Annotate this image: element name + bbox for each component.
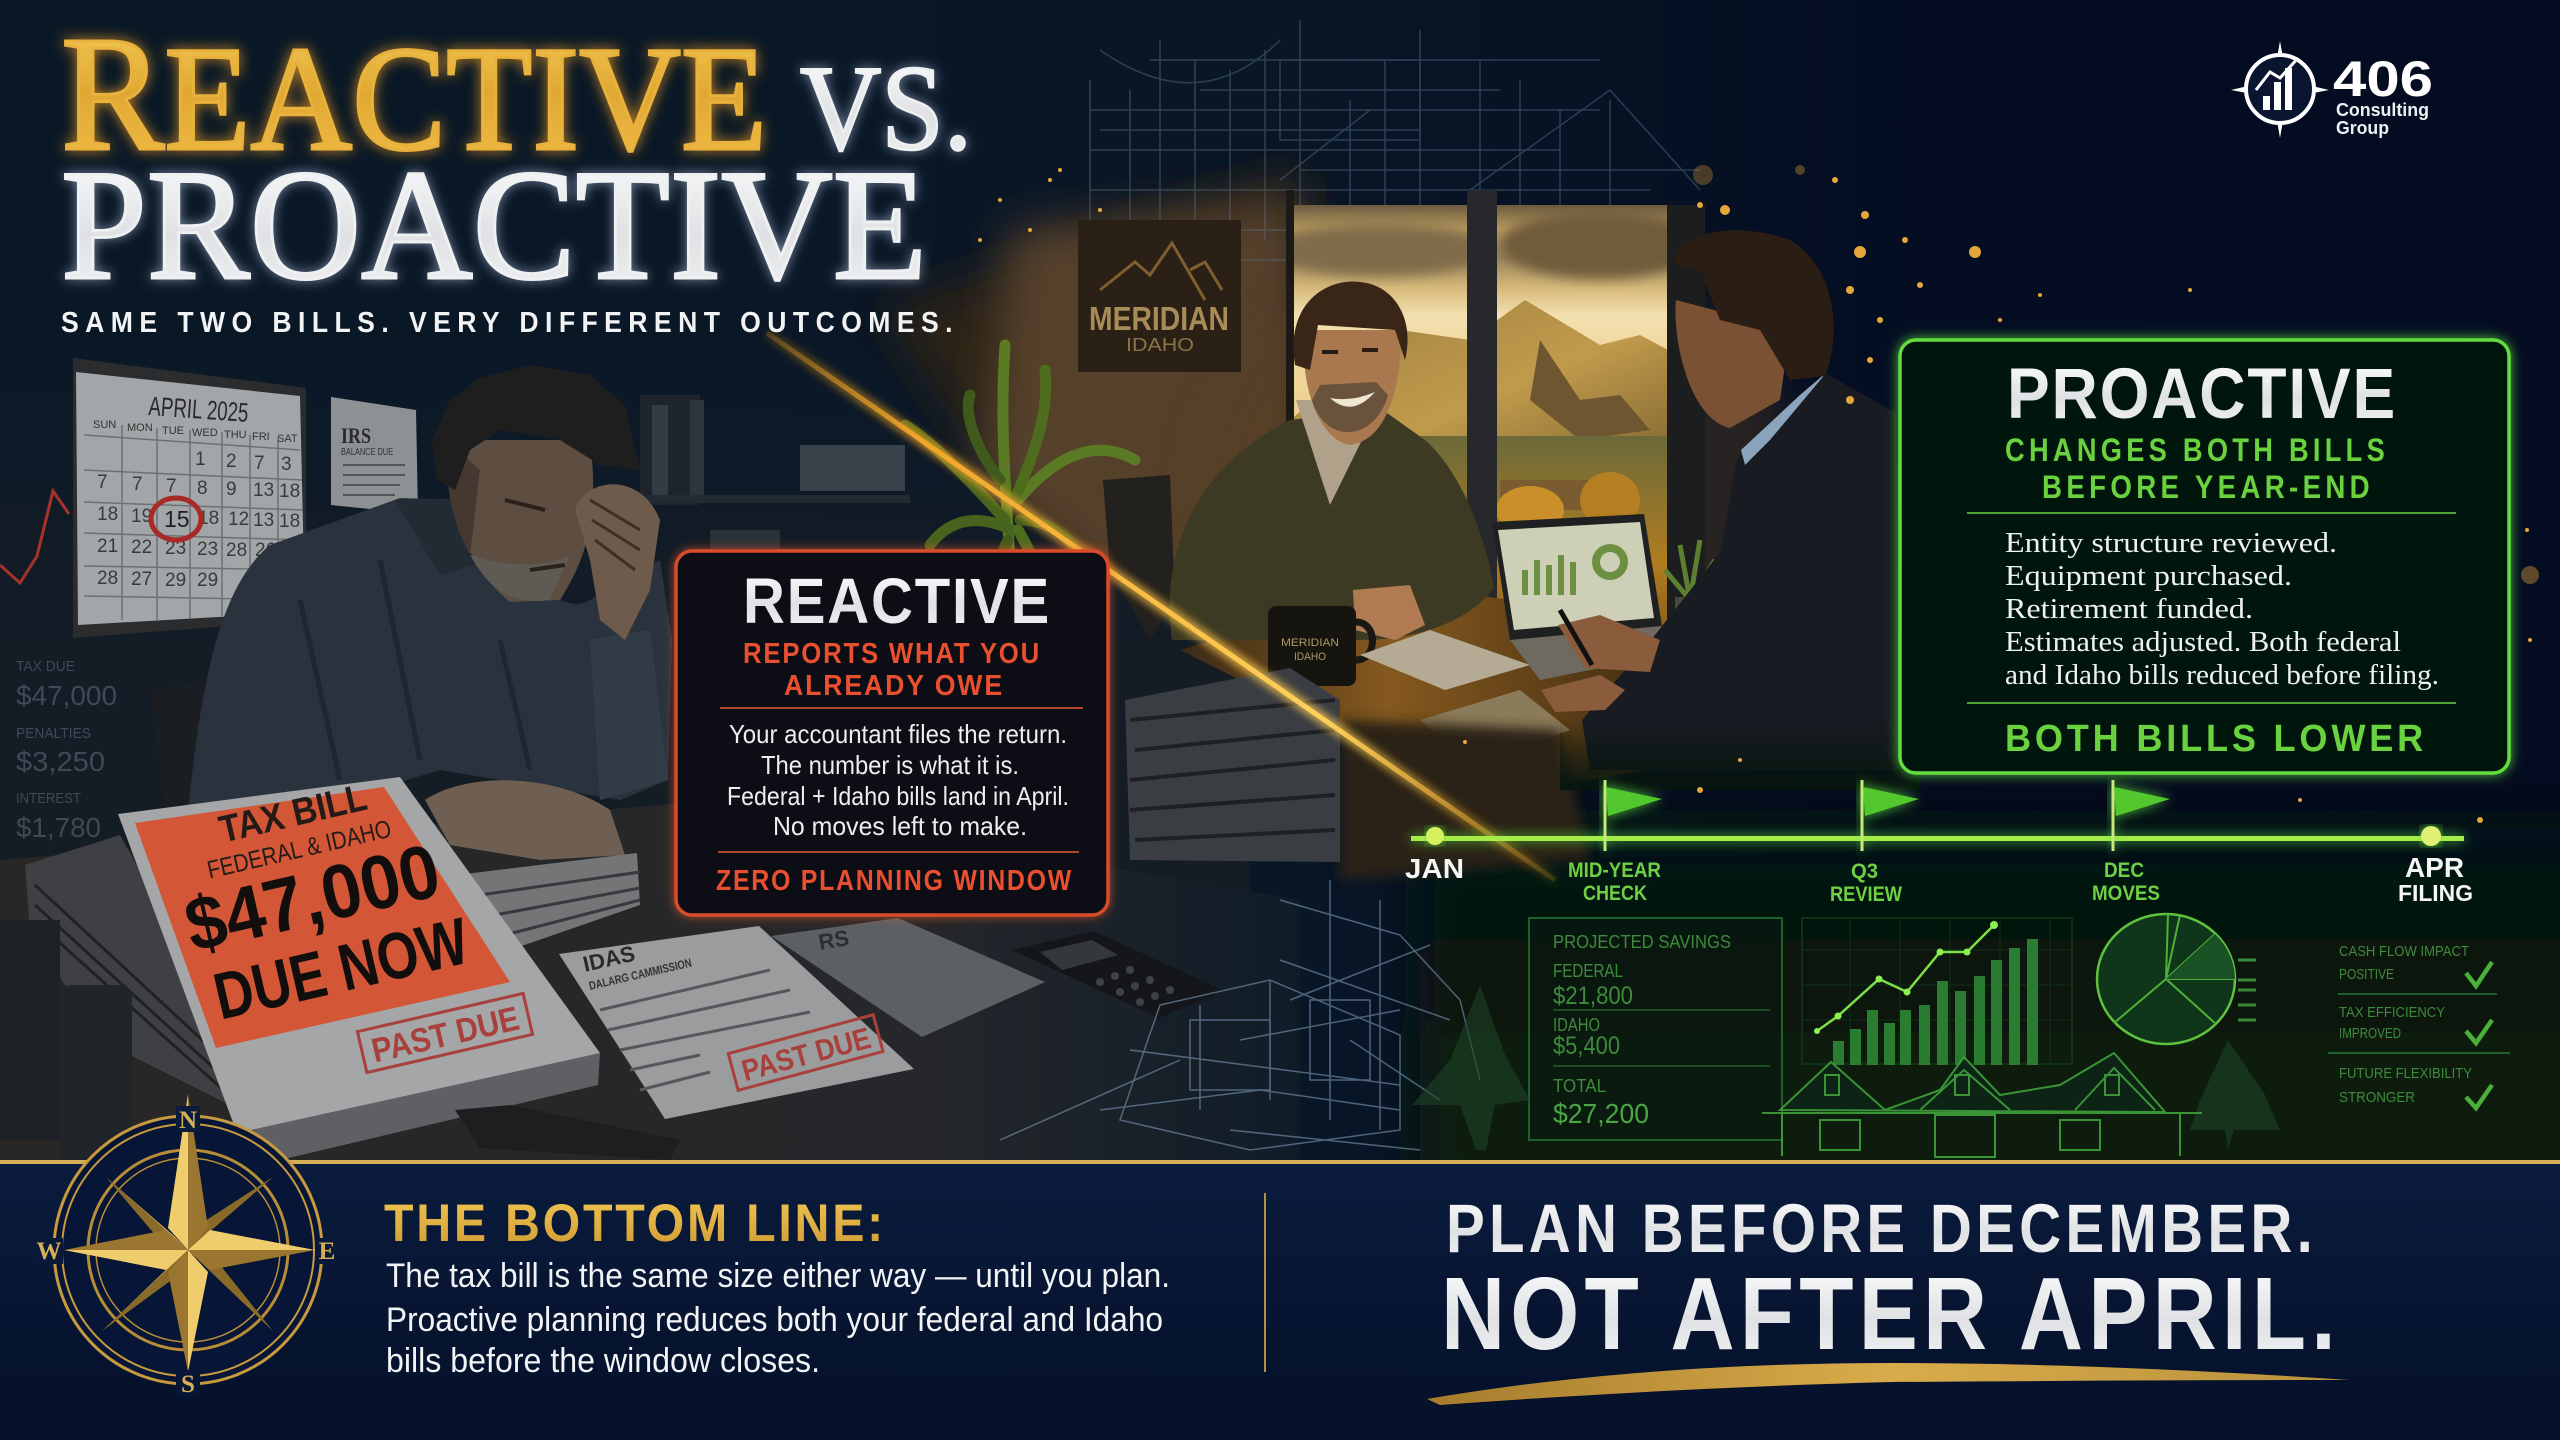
- calendar: 29: [165, 570, 186, 591]
- title: [61, 2, 972, 313]
- heading: proactive: PROACTIVE: [2007, 355, 2397, 434]
- calendar: 7: [132, 474, 143, 495]
- smiling man: [1170, 282, 1494, 640]
- gold brush stroke: [1427, 1363, 2349, 1405]
- compass emblem: W: [36, 1238, 62, 1265]
- reactive body text: Your accountant files the return.: [729, 719, 1067, 749]
- paper stack at desk: [1125, 668, 1340, 862]
- desk: [1180, 585, 1700, 800]
- panel: outcome checklist: CASH FLOW IMPACT: [2339, 943, 2469, 960]
- shelves: [640, 395, 910, 565]
- faded tax figures: $1,780: [16, 812, 101, 843]
- calculator: [1012, 931, 1224, 1018]
- tax bill: DUE NOW: [207, 903, 476, 1033]
- panel: projected savings: $21,800: [1553, 982, 1633, 1010]
- panel: projected savings: [1529, 918, 1782, 1140]
- bottom line body: The tax bill is the same size either way — until you plan.: [386, 1257, 1170, 1295]
- title: REACTIVE: [61, 2, 767, 185]
- IRS notice: BALANCE DUE: [341, 447, 393, 458]
- calendar: 7: [97, 472, 108, 493]
- heading: reactive: REACTIVE: [743, 565, 1051, 637]
- calendar: 29: [197, 570, 218, 591]
- compass emblem: E: [319, 1238, 335, 1265]
- panel: projected savings: IDAHO: [1553, 1015, 1600, 1035]
- panel: proactive: [1900, 340, 2509, 773]
- proactive body text: Equipment purchased.: [2005, 560, 2292, 592]
- tax bill: TAX BILL: [215, 777, 371, 851]
- calendar: APRIL 2025: [148, 391, 249, 428]
- flag: Q3: [1862, 780, 1919, 851]
- calendar: TUE: [162, 425, 184, 437]
- compass emblem: S: [181, 1371, 195, 1398]
- panel: projected savings: FEDERAL: [1553, 961, 1623, 981]
- reactive body text: No moves left to make.: [773, 811, 1027, 841]
- calendar: 13: [253, 480, 274, 501]
- fade into green zone: [1560, 720, 1920, 790]
- calendar: MON: [127, 422, 153, 434]
- gold sparkles: [978, 165, 2539, 823]
- faded tax figures: INTEREST: [16, 790, 81, 807]
- panel: projected savings: PROJECTED SAVINGS: [1553, 932, 1731, 952]
- calendar: 26: [255, 540, 276, 561]
- mug: [1268, 606, 1372, 686]
- proactive body text: and Idaho bills reduced before filing.: [2005, 659, 2439, 691]
- Meridian Idaho sign: MERIDIAN: [1089, 300, 1229, 337]
- timeline labels: MOVES: [2092, 882, 2160, 905]
- zero planning window: ZERO PLANNING WINDOW: [716, 865, 1073, 897]
- proactive body text: Estimates adjusted. Both federal: [2005, 626, 2401, 658]
- Idaho notice and IRS notice: RS: [817, 925, 851, 955]
- flag: mid-year: [1605, 780, 1662, 851]
- faded tax figures: PENALTIES: [16, 725, 91, 742]
- bottom band: [0, 1160, 2560, 1440]
- calendar: FRI: [252, 431, 270, 443]
- subheading: changes both bills: [2005, 432, 2389, 505]
- subheading: reports what you already owe: REPORTS WHAT YOU: [743, 638, 1041, 670]
- panel: projected savings: $27,200: [1553, 1098, 1649, 1129]
- closing headline: NOT AFTER APRIL.: [1441, 1256, 2341, 1371]
- tax bill: [118, 762, 600, 1160]
- compass mark: [2231, 41, 2329, 138]
- closing headline: [1441, 1190, 2341, 1371]
- reactive body text: The number is what it is.: [761, 750, 1019, 780]
- faded tax figures: $47,000: [16, 680, 117, 711]
- Idaho notice and IRS notice: [559, 918, 1045, 1119]
- calendar: 18: [97, 504, 118, 525]
- timeline labels: DEC: [2104, 859, 2144, 882]
- calendar: SUN: [93, 419, 116, 431]
- faded tax figures: [16, 658, 117, 843]
- subheading: changes both bills: BEFORE YEAR-END: [2042, 469, 2374, 505]
- panel: outcome checklist: FUTURE FLEXIBILITY: [2339, 1065, 2472, 1082]
- faded tax figures: TAX DUE: [16, 658, 75, 675]
- calendar: 27: [131, 569, 152, 590]
- small desk plant: [1665, 540, 1715, 637]
- logo: 406: [2333, 51, 2433, 107]
- Meridian Idaho sign: IDAHO: [1126, 335, 1194, 355]
- mug at left: [0, 920, 132, 1175]
- calendar: 15: [164, 506, 190, 532]
- reactive body text: [727, 719, 1069, 841]
- calendar: 7: [166, 476, 177, 497]
- IRS notice: [331, 397, 418, 514]
- tax bill: FEDERAL & IDAHO: [205, 815, 394, 884]
- stressed man: [188, 365, 672, 860]
- reactive body text: Federal + Idaho bills land in April.: [727, 781, 1069, 811]
- proactive body text: [2005, 527, 2439, 691]
- calendar: 1: [195, 449, 206, 470]
- gold diagonal divider: [767, 333, 1555, 880]
- bottom line body: bills before the window closes.: [386, 1342, 820, 1380]
- panel: outcome checklist: POSITIVE: [2339, 966, 2394, 983]
- marker pen: [455, 1105, 680, 1160]
- wood shadow under desk: [1340, 720, 1590, 880]
- chair back: [150, 680, 215, 810]
- panel: outcome checklist: IMPROVED: [2339, 1025, 2401, 1042]
- mug: MERIDIAN: [1281, 637, 1339, 649]
- title: VS.: [800, 41, 972, 176]
- subtitle: SAME TWO BILLS. VERY DIFFERENT OUTCOMES.: [61, 307, 959, 339]
- timeline labels: [1405, 852, 2473, 906]
- Idaho notice and IRS notice: PAST DUE: [738, 1022, 874, 1088]
- office scene: [905, 190, 1920, 880]
- panel: outcome checklist: [2328, 943, 2510, 1108]
- logo: Consulting: [2336, 100, 2429, 120]
- calendar: WED: [192, 427, 218, 439]
- laptop: [1492, 514, 1662, 680]
- bottom line body: [386, 1257, 1170, 1380]
- paper stacks: [25, 835, 640, 1110]
- calendar: 8: [197, 478, 208, 499]
- timeline labels: FILING: [2398, 880, 2473, 906]
- flag: Dec: [2113, 780, 2170, 851]
- calendar: THU: [224, 429, 247, 441]
- timeline labels: Q3: [1851, 860, 1878, 883]
- bar chart: [1802, 918, 2072, 1065]
- calendar: 18: [279, 481, 300, 502]
- title: PROACTIVE: [61, 138, 927, 313]
- house blueprint: [1762, 1053, 2202, 1157]
- subheading: changes both bills: CHANGES BOTH BILLS: [2005, 432, 2389, 468]
- calendar: 19: [131, 506, 152, 527]
- both bills lower: BOTH BILLS LOWER: [2005, 718, 2427, 760]
- compass emblem: [35, 1094, 340, 1398]
- timeline end dot: [2421, 826, 2441, 846]
- blueprint overlay: building: [1000, 880, 1480, 1150]
- IRS notice: IRS: [341, 423, 371, 448]
- calendar: 23: [197, 539, 218, 560]
- panel: reactive: [676, 551, 1108, 915]
- tax bill: $47,000: [177, 828, 448, 969]
- timeline labels: MID-YEAR: [1568, 859, 1661, 882]
- calendar: 2: [226, 451, 237, 472]
- Meridian Idaho sign: [1078, 220, 1241, 372]
- calendar: 18: [198, 508, 219, 529]
- panel: projected savings: $5,400: [1553, 1032, 1620, 1060]
- panel: projected savings: TOTAL: [1553, 1076, 1606, 1096]
- timeline labels: REVIEW: [1830, 883, 1902, 906]
- chair: [1103, 475, 1175, 640]
- calendar: 18: [279, 511, 300, 532]
- advisor: [1541, 230, 1899, 770]
- window: [1286, 190, 1705, 626]
- proactive body text: Entity structure reviewed.: [2005, 527, 2337, 559]
- past due stamp: PAST DUE: [368, 1000, 523, 1070]
- timeline labels: APR: [2405, 852, 2464, 883]
- bottom line body: Proactive planning reduces both your federal and Idaho: [386, 1301, 1163, 1339]
- closing headline: PLAN BEFORE DECEMBER.: [1446, 1190, 2317, 1267]
- potted plant: [905, 345, 1135, 600]
- proactive body text: Retirement funded.: [2005, 593, 2253, 625]
- calendar: [73, 358, 306, 638]
- calendar: 12: [228, 509, 249, 530]
- calendar: 28: [97, 568, 118, 589]
- panel: outcome checklist: TAX EFFICIENCY: [2339, 1004, 2445, 1021]
- background: [0, 153, 2560, 1160]
- chart on wall: [0, 491, 69, 583]
- logo: [2231, 41, 2433, 138]
- logo: Group: [2336, 118, 2389, 138]
- desk surface: [0, 800, 1300, 1162]
- calendar: 7: [254, 453, 265, 474]
- pie chart: [2097, 914, 2256, 1044]
- timeline: [1405, 780, 2473, 906]
- Idaho notice and IRS notice: IDAS: [581, 941, 637, 977]
- timeline start dot: [1426, 827, 1444, 845]
- mug: IDAHO: [1294, 651, 1326, 663]
- timeline labels: CHECK: [1583, 882, 1647, 905]
- compass emblem: N: [179, 1107, 197, 1134]
- bottom line heading: THE BOTTOM LINE:: [384, 1194, 886, 1253]
- timeline labels: JAN: [1405, 853, 1464, 884]
- panel: outcome checklist: STRONGER: [2339, 1089, 2415, 1106]
- calendar: 13: [253, 510, 274, 531]
- blueprint overlay: top: [1090, 20, 1700, 260]
- calendar: 22: [131, 537, 152, 558]
- calendar: 28: [226, 540, 247, 561]
- pine trees: [1412, 985, 2280, 1150]
- calendar: SAT: [277, 433, 298, 445]
- calendar: 21: [97, 536, 118, 557]
- left scene: [0, 358, 1300, 1175]
- notebook and papers: [1360, 630, 1530, 690]
- subheading: reports what you already owe: ALREADY OWE: [784, 670, 1004, 702]
- faded tax figures: $3,250: [16, 746, 105, 777]
- calendar: 9: [226, 479, 237, 500]
- subheading: reports what you already owe: [743, 638, 1041, 702]
- calendar: 23: [165, 538, 186, 559]
- red date circle: [151, 498, 201, 540]
- Idaho notice and IRS notice: DALARG CAMMISSION: [588, 956, 693, 993]
- calendar: 3: [281, 454, 292, 475]
